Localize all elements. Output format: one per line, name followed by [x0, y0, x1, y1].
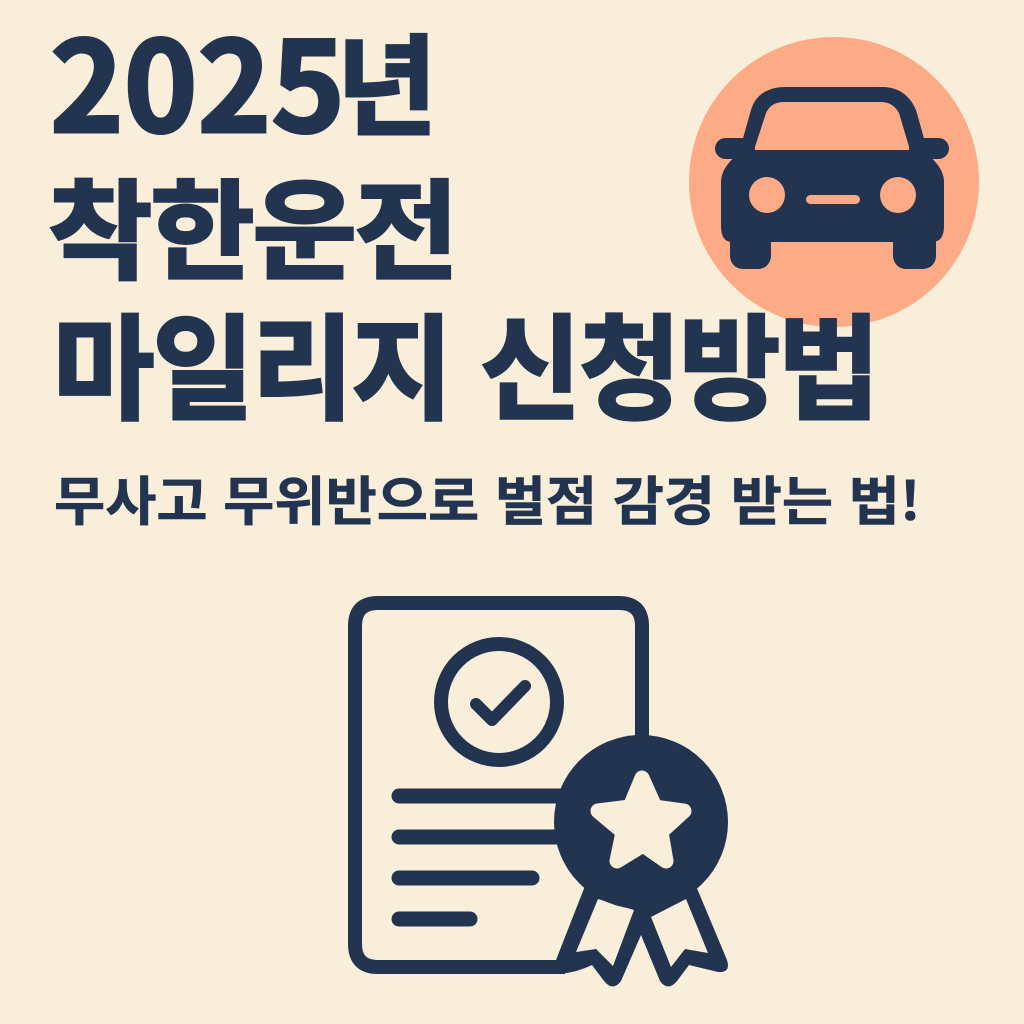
subtitle: 무사고 무위반으로 벌점 감경 받는 법! — [54, 460, 921, 536]
title line 2: 착한운전 — [48, 146, 457, 302]
title line 1: 년 — [337, 1, 437, 158]
title line 3: 마일리지 신청방법 — [53, 278, 878, 443]
